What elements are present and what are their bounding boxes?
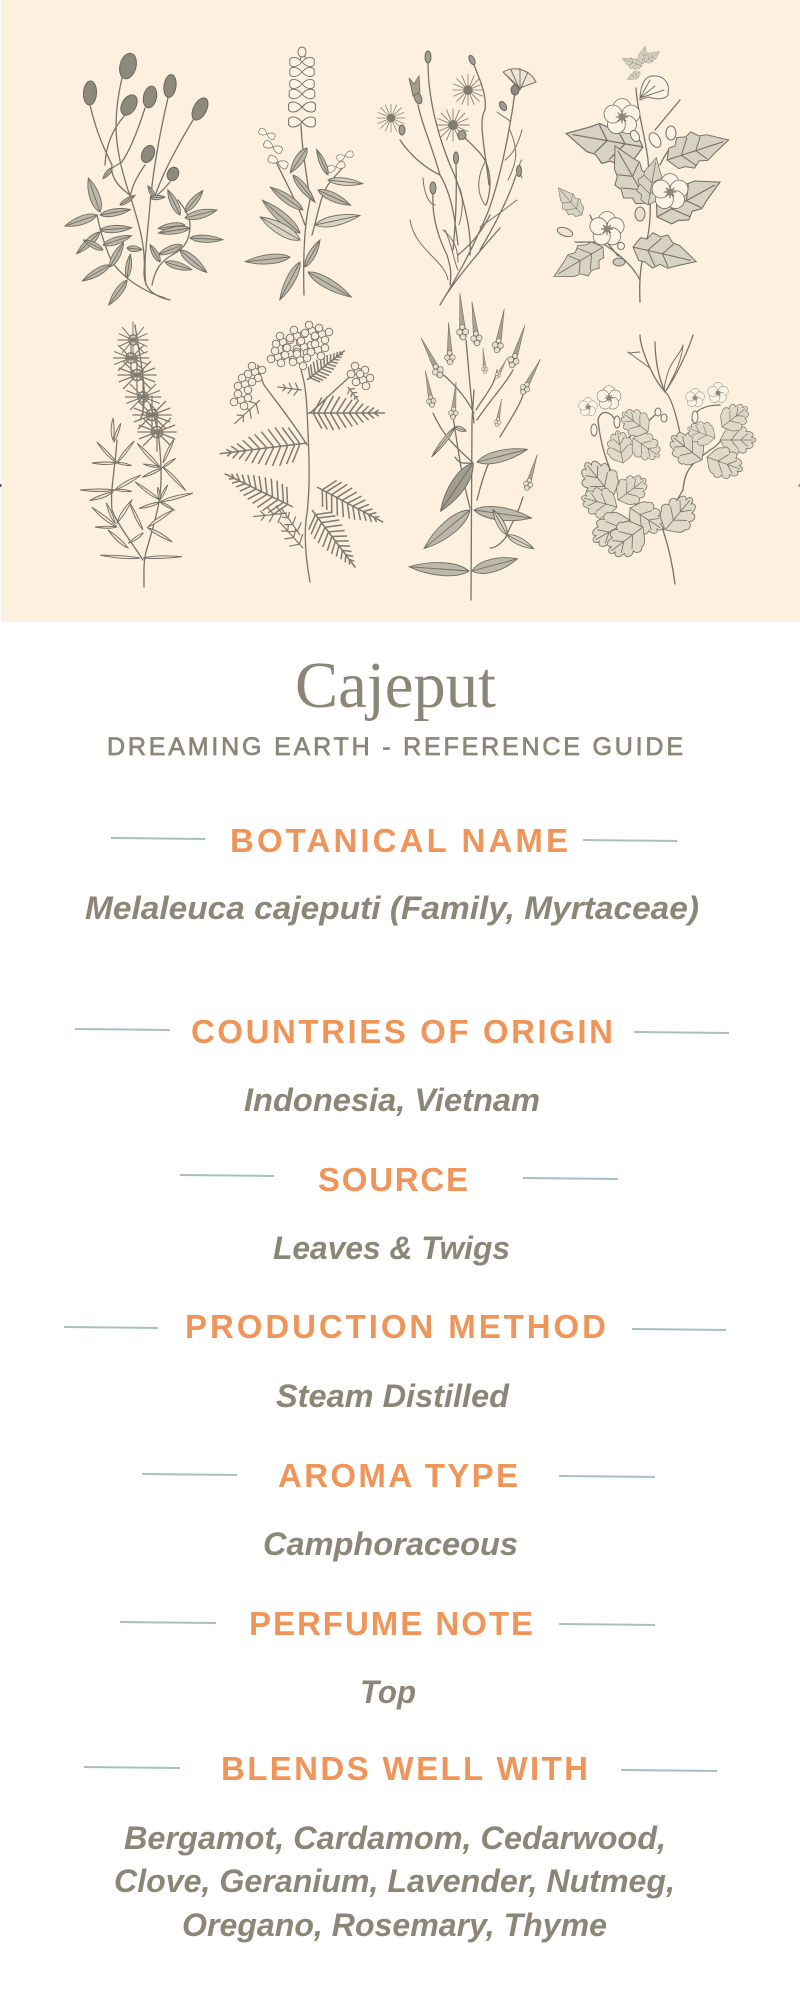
value: botanical name: Melaleuca cajeputi (Family, Myrtaceae) [85, 890, 699, 926]
section: aroma type [142, 1457, 655, 1562]
illustration: mallow plant [547, 45, 734, 302]
illustration: celandine plant [571, 335, 756, 584]
section: perfume note [120, 1605, 655, 1710]
value: aroma type: Camphoraceous [263, 1526, 518, 1562]
illustration: savory plant [80, 322, 193, 587]
illustration: cornflower plant [377, 51, 536, 305]
illustration: burnet plant [63, 51, 223, 307]
value: perfume note: Top [360, 1674, 416, 1710]
heading: perfume note: PERFUME NOTE [249, 1605, 533, 1642]
illustration: sage plant [245, 47, 363, 302]
value: production method: Steam Distilled [276, 1378, 510, 1414]
illustration: verbena plant [409, 293, 545, 600]
illustration: tansy plant [217, 321, 391, 582]
value: blends well with: Oregano, Rosemary, Thyme [182, 1907, 607, 1943]
section: production method [64, 1308, 726, 1414]
section: botanical name [85, 822, 699, 926]
heading: production method: PRODUCTION METHOD [185, 1308, 606, 1345]
value: blends well with [114, 1820, 675, 1943]
heading: source: SOURCE [318, 1161, 468, 1198]
value: countries of origin: Indonesia, Vietnam [244, 1082, 540, 1118]
heading: botanical name: BOTANICAL NAME [230, 822, 568, 859]
header panel: botanical illustrations [0, 0, 800, 622]
value: blends well with: Bergamot, Cardamom, Cedarwood, [124, 1820, 666, 1856]
section: blends well with [84, 1750, 717, 1943]
value: source: Leaves & Twigs [273, 1230, 510, 1266]
heading: blends well with: BLENDS WELL WITH [221, 1750, 588, 1787]
section: source [180, 1161, 618, 1266]
value: blends well with: Clove, Geranium, Lavender, Nutmeg, [114, 1863, 675, 1899]
section: countries of origin [75, 1013, 729, 1118]
heading: aroma type: AROMA TYPE [278, 1457, 518, 1494]
subtitle: DREAMING EARTH - REFERENCE GUIDE [107, 733, 683, 761]
heading: countries of origin: COUNTRIES OF ORIGIN [191, 1013, 613, 1050]
title: Cajeput [295, 649, 496, 722]
